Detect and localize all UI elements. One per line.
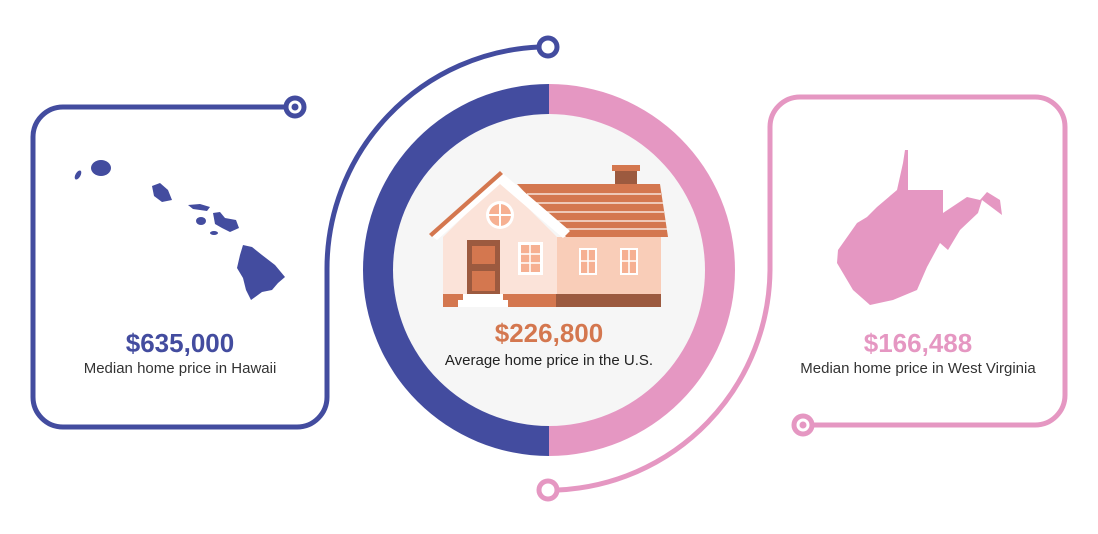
text: hawaii label: Median home price in Hawaii: [84, 360, 276, 377]
icon: west virginia: [837, 150, 1002, 305]
node dot: hawaii: [292, 104, 298, 110]
donut ring: [363, 84, 735, 456]
node dot: west virginia: [800, 422, 806, 428]
icon: hawaii islands: [73, 160, 285, 300]
icon: house: [429, 165, 668, 307]
text: us label: Average home price in the U.S.: [445, 352, 653, 369]
text: wv price: $166,488: [864, 328, 972, 358]
text: wv label: Median home price in West Virginia: [800, 360, 1036, 377]
text: us price: $226,800: [495, 318, 603, 348]
text: hawaii price: $635,000: [126, 328, 234, 358]
panel: west virginia frame: [539, 97, 1065, 499]
panel: hawaii frame: [33, 38, 557, 427]
